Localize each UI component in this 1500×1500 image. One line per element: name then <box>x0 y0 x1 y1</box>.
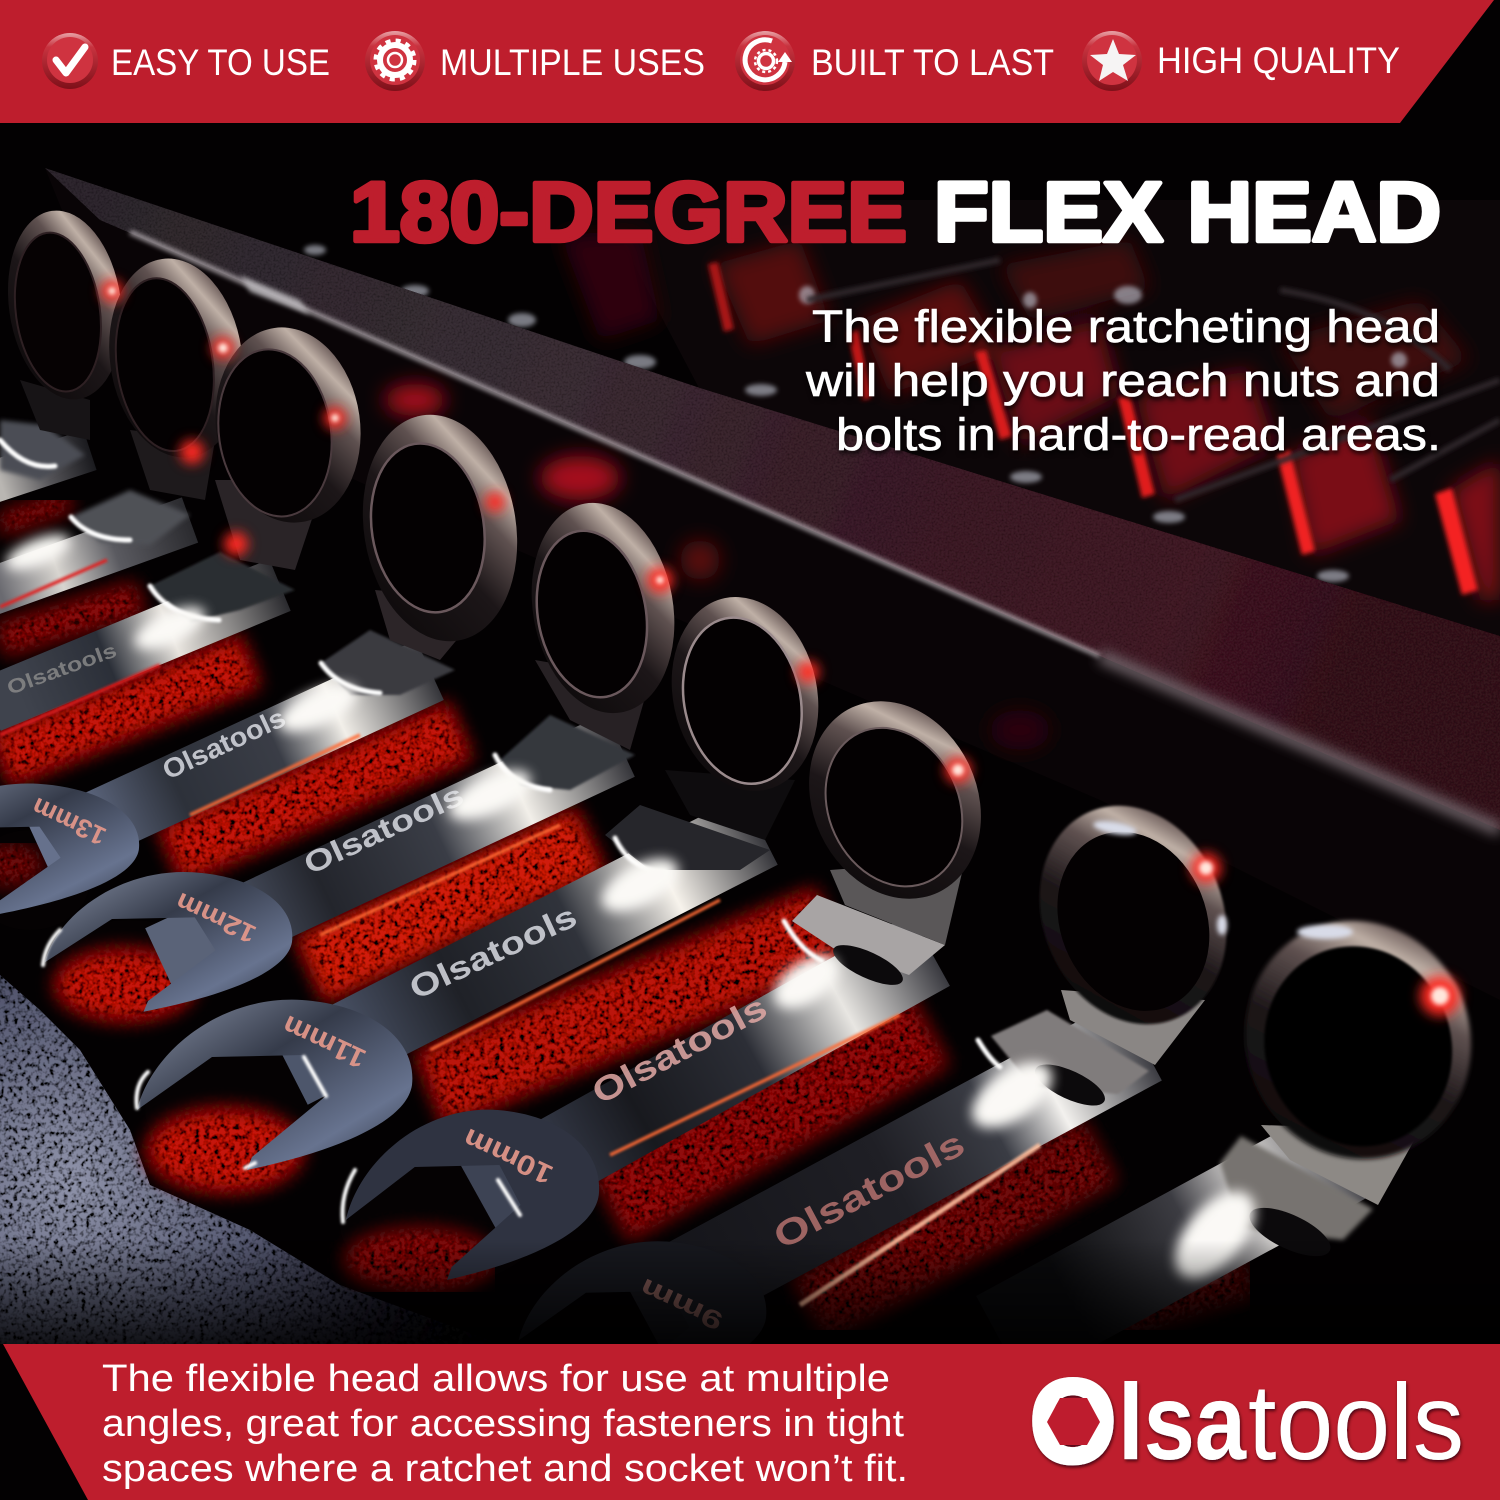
bottom red banner <box>3 1344 1500 1500</box>
logo: tools <box>1248 1361 1464 1482</box>
red glow on rail front face <box>385 384 1050 750</box>
description text <box>805 301 1441 460</box>
description text: The flexible ratcheting head <box>812 301 1440 352</box>
engraved brand and size marks: Olsatools <box>299 779 469 881</box>
engraved brand and size marks: 12mm <box>171 887 261 950</box>
heading <box>350 165 1441 259</box>
engraved brand and size marks: Olsatools <box>404 898 582 1006</box>
rail bar <box>45 168 1500 1000</box>
label: high quality: HIGH QUALITY <box>1157 40 1400 81</box>
footer text: angles, great for accessing fasteners in tight <box>102 1403 904 1445</box>
badge: multiple uses <box>365 31 425 91</box>
heading: FLEX HEAD <box>934 165 1441 259</box>
open-end jaws <box>0 783 766 1394</box>
engraved brand and size marks: Olsatools <box>767 1122 971 1257</box>
engraved brand and size marks: 13mm <box>27 792 111 852</box>
engraved brand and size marks <box>4 640 971 1337</box>
engraved brand and size marks: Olsatools <box>586 988 773 1112</box>
engraved brand and size marks: 10mm <box>458 1122 558 1191</box>
logo <box>1030 1356 1464 1488</box>
badge: built to last <box>735 31 795 91</box>
engraved brand and size marks: Olsatools <box>158 702 290 785</box>
badge: high quality <box>1082 31 1142 91</box>
heading: 180-DEGREE <box>350 165 907 259</box>
top red banner <box>0 0 1494 123</box>
red reflections under open ends <box>0 830 540 1292</box>
description text: bolts in hard-to-read areas. <box>836 409 1441 460</box>
logo: lsa <box>1118 1361 1247 1482</box>
footer text: The flexible head allows for use at multiple <box>102 1358 890 1400</box>
wrench handles <box>0 450 1350 1340</box>
label: built to last: BUILT TO LAST <box>811 42 1054 83</box>
specular highlights <box>2 280 1460 1293</box>
ring heads <box>0 203 1500 1191</box>
socket tray with red sockets <box>304 200 1500 640</box>
label: easy to use: EASY TO USE <box>111 42 330 83</box>
engraved brand and size marks: 9mm <box>635 1272 728 1337</box>
label: multiple uses: MULTIPLE USES <box>440 42 705 83</box>
badge: easy to use <box>42 33 98 89</box>
engraved brand and size marks: 11mm <box>278 1009 371 1075</box>
ring head bodies <box>20 380 1420 1205</box>
flex neck blocks <box>0 420 1373 1266</box>
footer text <box>102 1358 908 1490</box>
bottom photo vignette <box>0 1240 1500 1344</box>
description text: will help you reach nuts and <box>805 355 1440 406</box>
red textured mat <box>0 500 1250 1330</box>
grey mat foreground <box>0 975 500 1344</box>
logo: O <box>1030 1356 1116 1488</box>
footer text: spaces where a ratchet and socket won’t fit. <box>102 1448 908 1490</box>
engraved brand and size marks: Olsatools <box>4 640 120 700</box>
